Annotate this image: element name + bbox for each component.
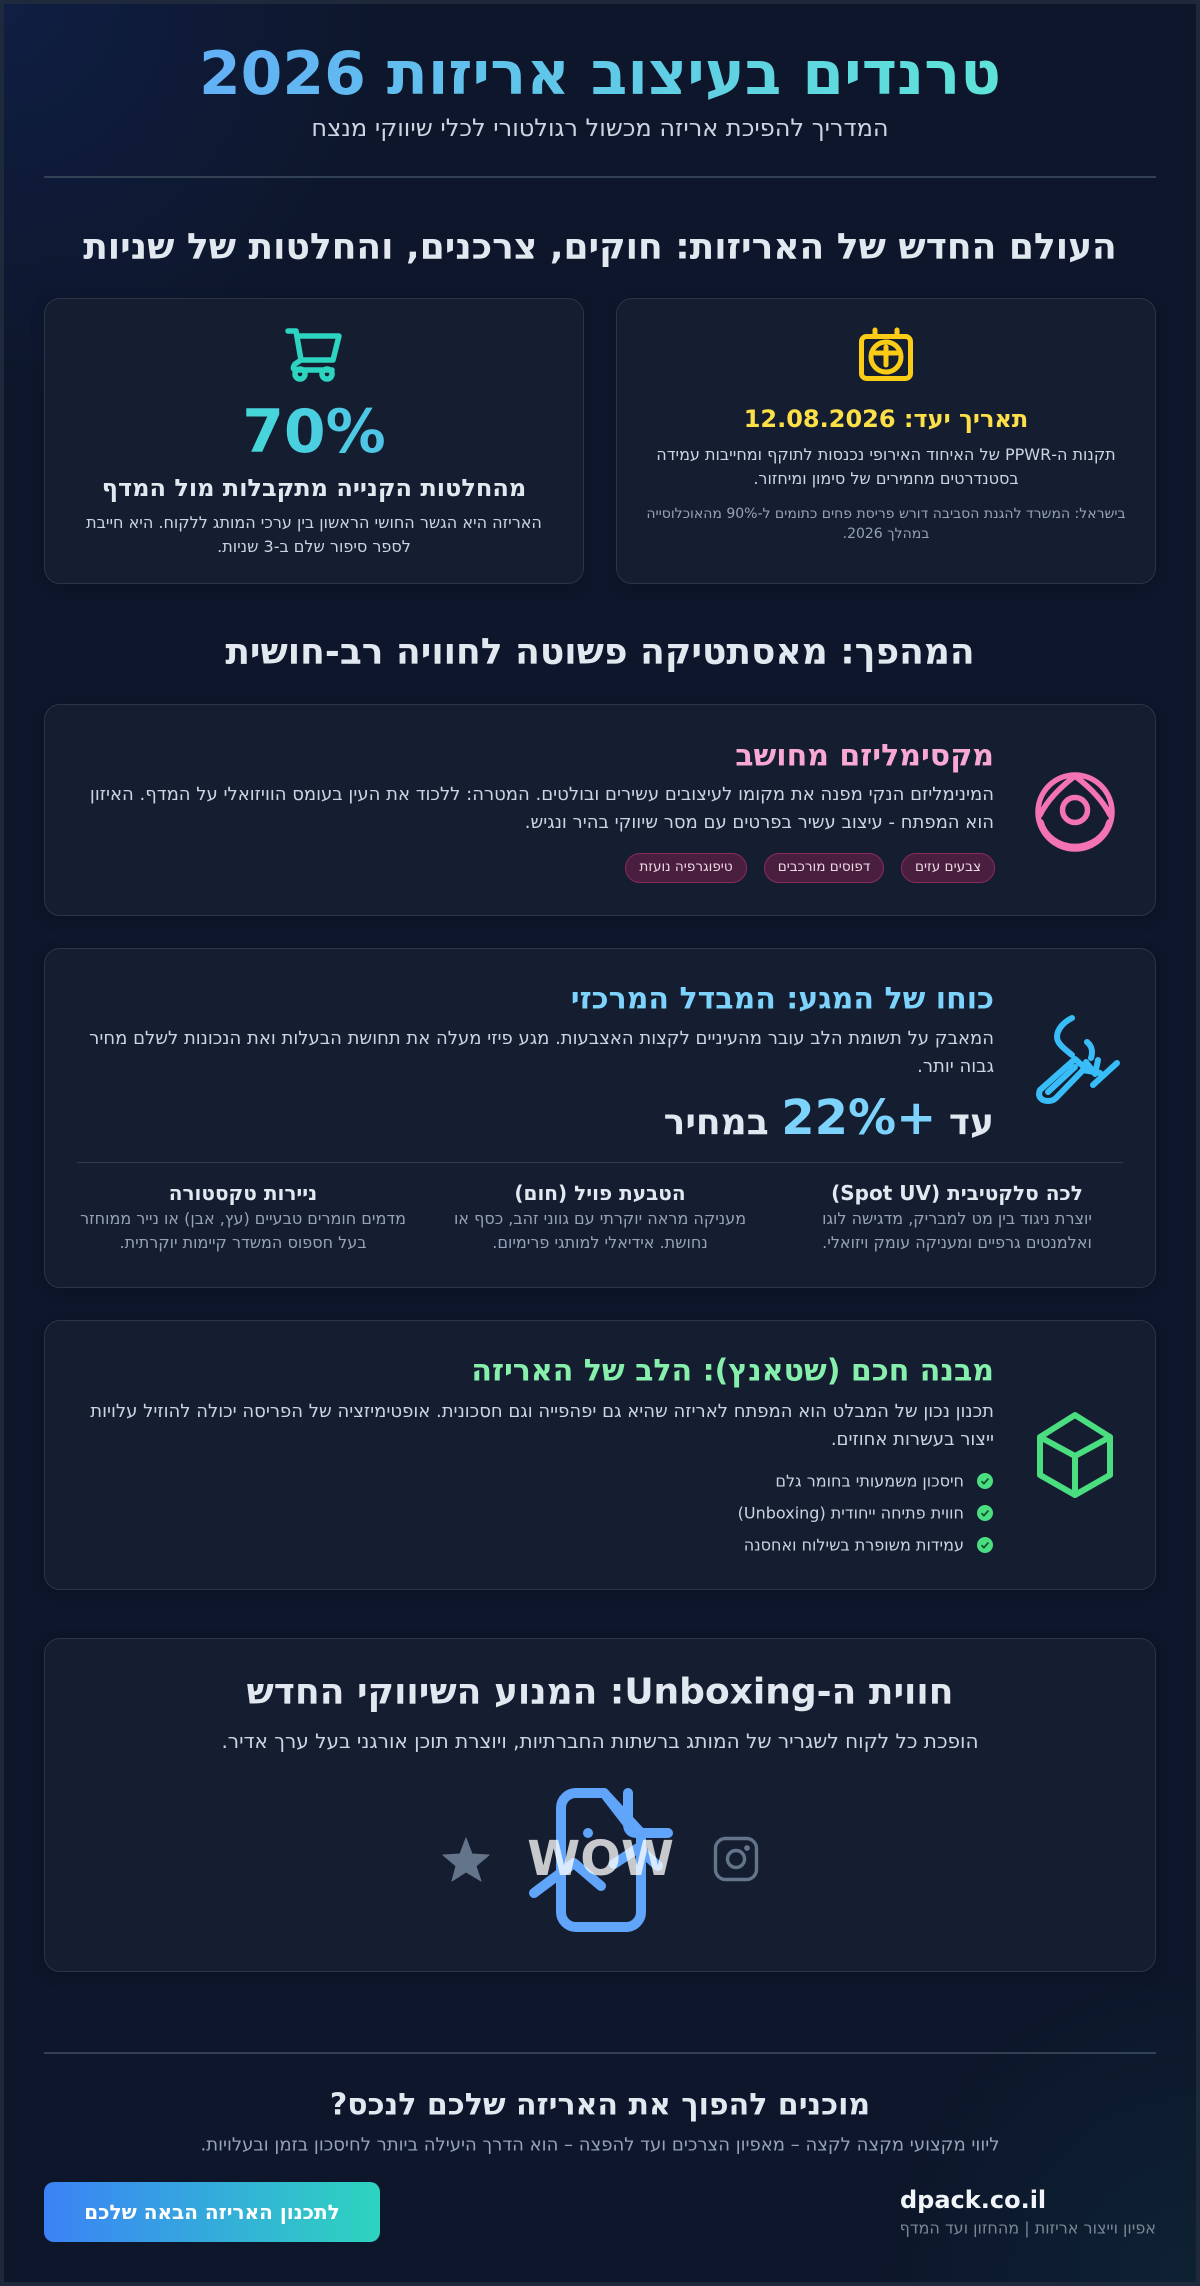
check icon [977,1505,993,1521]
icon: calendar [859,328,913,381]
card title: כוחו של המגע: המבדל המרכזי [571,982,994,1016]
card body [90,784,994,833]
finish text: מעניקה מראה יוקרתי עם גווני זהב, כסף או [454,1209,746,1228]
panel: unboxing [44,1638,1156,1972]
card title: מקסימליזם מחושב [735,738,994,774]
tag: דפוסים מורכבים [778,859,870,875]
brand block [900,2186,1156,2238]
panel: smart structure [44,1320,1156,1590]
israel note: בישראל: המשרד להגנת הסביבה דורש פריסת פחים כתומים ל-90% מהאוכלוסייה [646,506,1126,522]
regulation text: בסטנדרטים מחמירים של סימון ומיחזור. [753,469,1019,488]
card body: ייצור בעשרות אחוזים. [831,1429,994,1450]
finish title: לכה סלקטיבית (Spot UV) [831,1181,1083,1205]
finish text [80,1209,406,1252]
stat description [86,513,542,556]
finish text: נחושת. אידיאלי למותגי פרימיום. [492,1233,708,1252]
finish: foil stamping [454,1181,746,1252]
check icon [977,1473,993,1489]
tag [901,853,995,883]
icon: box [1037,1412,1113,1498]
finish text: מדמים חומרים טבעיים (עץ, אבן) או נייר ממוחזר [80,1209,406,1228]
icon: touch tool [1036,1015,1120,1104]
card title: מבנה חכם (שטאנץ): הלב של האריזה [471,1354,994,1388]
finish: textured papers [80,1181,406,1252]
icon: instagram [714,1836,758,1882]
check icon [977,1537,993,1553]
target date: תאריך יעד: 12.08.2026 [744,405,1028,433]
tag: צבעים עזים [915,859,981,875]
call to action button [44,2182,380,2242]
list item: עמידות משופרת בשילוח ואחסנה [744,1536,964,1554]
icon: star [442,1838,490,1882]
finish text: בעל חספוס המשדר קיימות יוקרתית. [120,1233,366,1252]
finish text [454,1209,746,1252]
card body: הוא המפתח - עיצוב עשיר בפרטים עם מסר שיווקי בהיר ונגיש. [525,812,994,833]
israel note: במהלך 2026. [843,526,929,542]
stat description: לספר סיפור שלם ב-3 שניות. [217,537,411,556]
tag [625,853,747,883]
footer subtitle: ליווי מקצועי מקצה לקצה – מאפיון הצרכים ועד להפצה – הוא הדרך היעילה ביותר לחיסכון בזמן ובעלויות. [201,2134,999,2156]
panel: calculated maximalism [44,704,1156,916]
finish title: ניירות טקסטורה [169,1181,317,1205]
list item: חיסכון משמעותי בחומר גלם [775,1472,964,1490]
panel subtitle: הופכת כל לקוח לשגריר של המותג ברשתות החברתיות, ויוצרת תוכן אורגני בעל ערך אדיר. [221,1729,979,1753]
card body [89,1028,994,1077]
tag [764,853,884,883]
panel: power of touch [44,948,1156,1288]
card body [90,1401,994,1450]
stat number: 70% [242,397,386,467]
list item: חווית פתיחה ייחודית (Unboxing) [738,1504,964,1522]
israel note [646,506,1126,542]
stat description: האריזה היא הגשר החושי הראשון בין ערכי המותג ללקוח. היא חייבת [86,513,542,532]
card body: גבוה יותר. [917,1056,994,1077]
card body: המינימליזם הנקי מפנה את מקומו לעיצובים עשירים ובולטים. המטרה: ללכוד את העין בעומס הוויזואלי על המדף. האיזון [90,784,994,805]
card body: המאבק על תשומת הלב עובר מהעיניים לקצות האצבעות. מגע פיזי מעלה את תחושת הבעלות ואת הנכונות לשלם מחיר [89,1028,994,1049]
panel heading: חווית ה-Unboxing: המנוע השיווקי החדש [246,1672,954,1712]
title: טרנדים בעיצוב אריזות 2026 [199,39,1001,109]
brand name: dpack.co.il [900,2186,1046,2214]
footer heading: מוכנים להפוך את האריזה שלכם לנכס? [330,2088,870,2122]
finish text [822,1209,1092,1252]
regulation text [656,445,1116,488]
stat label: מהחלטות הקנייה מתקבלות מול המדף [102,474,526,502]
subtitle: המדריך להפיכת אריזה מכשול רגולטורי לכלי שיווקי מנצח [311,114,889,142]
tag: טיפוגרפיה נועזת [639,859,733,875]
card body: תכנון נכון של המבלט הוא המפתח לאריזה שהיא גם יפהפייה וגם חסכונית. אופטימיזציה של הפריסה יכולה להוזיל עלויות [90,1401,994,1422]
brand tagline: אפיון וייצור אריזות | מהחזון ועד המדף [900,2218,1156,2238]
finish: spot UV [822,1181,1092,1252]
regulation text: תקנות ה-PPWR של האיחוד האירופי נכנסות לתוקף ומחייבות עמידה [656,445,1116,464]
call to action button: לתכנון האריזה הבאה שלכם [84,2200,340,2224]
icon: image file [529,1788,673,1932]
panel: regulation date [616,298,1156,584]
price callout: עד +22% במחיר [664,1090,994,1146]
icon: pink droplet in circle [1035,772,1115,852]
finish title: הטבעת פויל (חום) [514,1181,686,1205]
finish text: יוצרת ניגוד בין מט למבריק, מדגישה לוגו [822,1209,1092,1228]
icon: shopping cart [285,328,342,382]
wow text: WOW [527,1831,674,1887]
panel: 70 percent stat [44,298,584,584]
heading: new world of packaging: העולם החדש של האריזות: חוקים, צרכנים, והחלטות של שניות [83,226,1117,268]
heading: the shift: המהפך: מאסתטיקה פשוטה לחוויה רב-חושית [225,632,975,672]
finish text: ואלמנטים גרפיים ומעניקה עומק ויזואלי. [822,1233,1092,1252]
